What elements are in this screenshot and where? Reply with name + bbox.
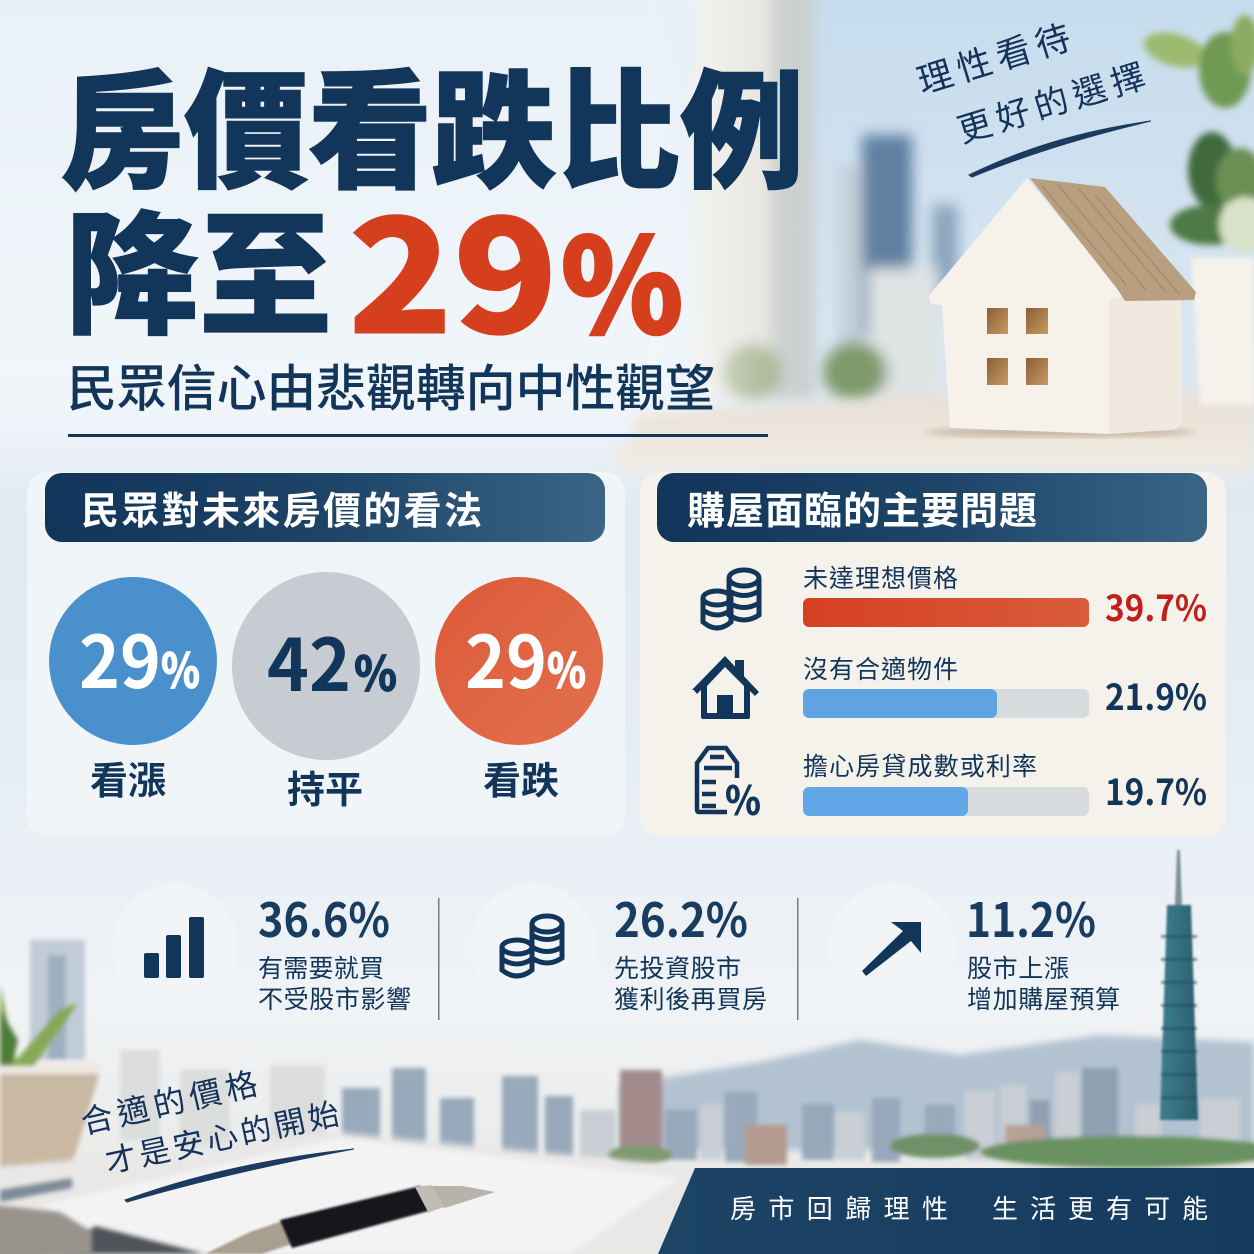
header bar: 購屋面臨的主要問題 <box>687 480 1037 535</box>
footer banner: 生活更有可能 <box>992 1189 1208 1226</box>
title: 降至 <box>66 168 332 362</box>
plant and pot <box>1140 15 1254 253</box>
icon: house <box>692 656 759 719</box>
donut: flat 42%: 持平 <box>287 759 363 814</box>
header bar: 民眾對未來房價的看法 <box>81 480 482 535</box>
desk and document with pen <box>0 1132 700 1254</box>
stat: 36.6%: 有需要就買 <box>258 949 384 985</box>
wooden house <box>925 178 1196 437</box>
stat: 11.2% <box>829 882 1120 1016</box>
stat: 36.6% <box>112 882 411 1016</box>
bar row: mortgage worries: 19.7% <box>1105 764 1207 816</box>
Taipei 101 tower <box>1160 850 1198 1120</box>
header bar <box>657 473 1207 542</box>
subtitle underline <box>68 434 768 437</box>
bar row: price: 39.7% <box>1105 580 1207 632</box>
handwritten note: bottom left: 才是安心的開始 <box>101 1088 346 1182</box>
title: 29 <box>348 152 558 378</box>
icon: coins <box>502 916 562 976</box>
donut: down 29%: 29 <box>465 604 547 709</box>
footer banner <box>658 1168 1254 1254</box>
title: % <box>561 183 683 371</box>
handwritten note: top right <box>910 8 1156 177</box>
header bar <box>45 473 605 542</box>
donut: up 29%: 29 <box>79 604 161 709</box>
bar row: mortgage worries <box>803 747 1207 816</box>
bar row: mortgage worries: 擔心房貸成數或利率 <box>803 747 1037 783</box>
title: 房價看跌比例 <box>60 29 804 214</box>
subtitle: 民眾信心由悲觀轉向中性觀望 <box>67 349 715 421</box>
donut: flat 42% <box>232 572 420 814</box>
mountains <box>620 1035 1254 1150</box>
title <box>60 29 804 378</box>
stat: 26.2%: 26.2% <box>614 882 748 951</box>
stat: 26.2%: 獲利後再買房 <box>614 980 767 1016</box>
donut: up 29%: 看漲 <box>90 750 166 805</box>
bar row: no suitable property: 21.9% <box>1105 669 1207 721</box>
bar row: no suitable property <box>803 650 1207 721</box>
icon: document percent: % <box>725 769 761 827</box>
icon: coins <box>703 570 759 628</box>
lower skyline <box>30 940 1254 1168</box>
panel: main problems buying a house <box>640 472 1226 836</box>
panel: public opinion on house prices <box>27 472 625 836</box>
bar row: no suitable property: 沒有合適物件 <box>803 650 958 686</box>
icon: arrow up right <box>862 922 921 976</box>
handwritten note: top right: 理性看待 <box>910 8 1082 105</box>
donut: flat 42%: 42 <box>267 607 351 712</box>
lower left plant and cup <box>0 985 100 1168</box>
stat: 26.2% <box>470 882 767 1016</box>
stat: 11.2%: 增加購屋預算 <box>967 980 1120 1016</box>
icon: document percent <box>697 748 761 827</box>
footer banner: 房市回歸理性 <box>730 1189 948 1226</box>
handwritten note: bottom left <box>76 1057 354 1202</box>
donut: flat 42%: % <box>354 635 397 705</box>
handwritten note: top right: 更好的選擇 <box>951 47 1156 153</box>
donut: down 29%: 看跌 <box>483 750 559 805</box>
stat: 26.2%: 先投資股市 <box>614 949 741 985</box>
stat: 36.6%: 不受股市影響 <box>258 980 411 1016</box>
icon: bars <box>144 917 204 978</box>
donut: up 29% <box>49 577 217 805</box>
stat: 36.6%: 36.6% <box>258 882 390 951</box>
donut: up 29%: % <box>161 632 200 702</box>
table surface top <box>600 394 1254 490</box>
stat: 11.2%: 11.2% <box>966 882 1096 951</box>
bar row: price <box>803 559 1207 632</box>
bar row: price: 未達理想價格 <box>803 559 958 595</box>
donut: down 29% <box>435 577 603 805</box>
handwritten note: bottom left: 合適的價格 <box>76 1057 267 1144</box>
donut: down 29%: % <box>547 632 586 702</box>
stat: 11.2%: 股市上漲 <box>967 949 1069 985</box>
